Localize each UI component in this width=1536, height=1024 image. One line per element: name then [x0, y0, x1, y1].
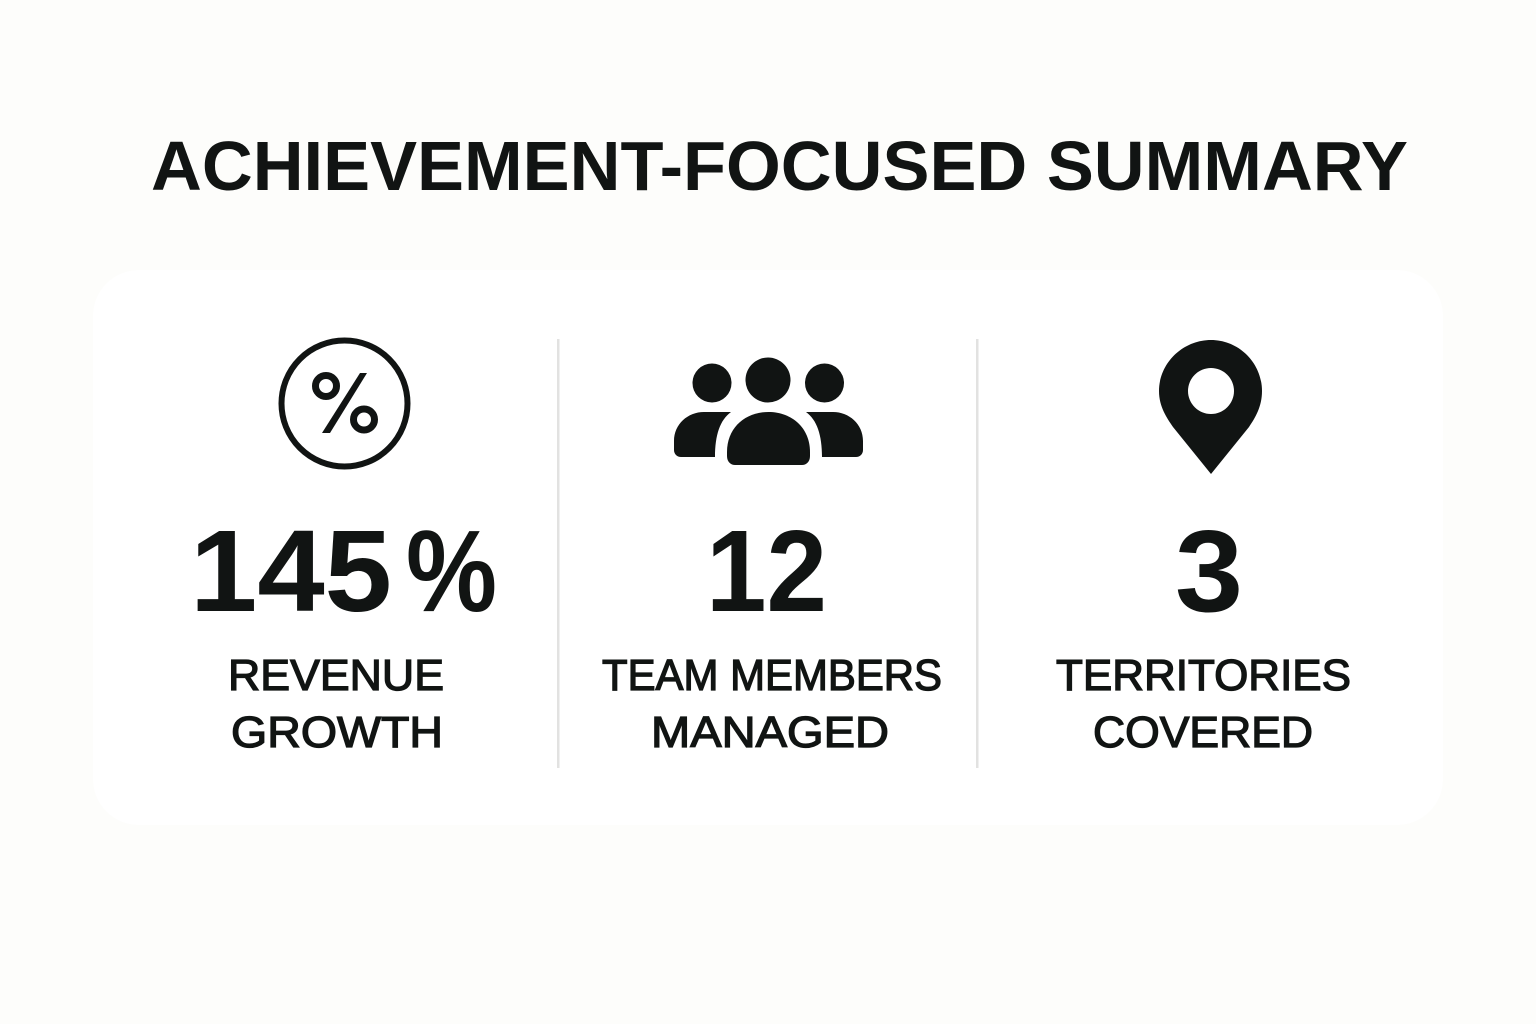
label: territories covered: TERRITORIES [1056, 651, 1351, 700]
stat: territories covered [1056, 340, 1351, 757]
label: revenue growth: GROWTH [231, 708, 443, 757]
divider left [557, 339, 560, 768]
label: revenue growth: REVENUE [228, 651, 444, 700]
stat: team members [602, 358, 942, 757]
label: territories covered [1056, 651, 1351, 757]
number: 3: 3 [1175, 506, 1243, 636]
label: team members managed: MANAGED [651, 708, 889, 757]
label: team members managed [602, 651, 942, 757]
icon: map pin [1159, 340, 1262, 474]
icon: percent circle [282, 340, 408, 466]
panel: stats card [93, 270, 1443, 825]
stat: revenue growth [190, 340, 497, 757]
number: 12: 12 [706, 506, 827, 636]
number: 145% [190, 506, 497, 636]
label: team members managed: TEAM MEMBERS [602, 651, 942, 700]
number: 145%: % [406, 506, 497, 636]
title: ACHIEVEMENT-FOCUSED SUMMARY [151, 127, 1408, 205]
label: territories covered: COVERED [1093, 708, 1313, 757]
divider right [976, 339, 978, 768]
label: revenue growth [228, 651, 444, 757]
icon: people group [674, 358, 863, 465]
number: 145%: 145 [190, 506, 392, 636]
